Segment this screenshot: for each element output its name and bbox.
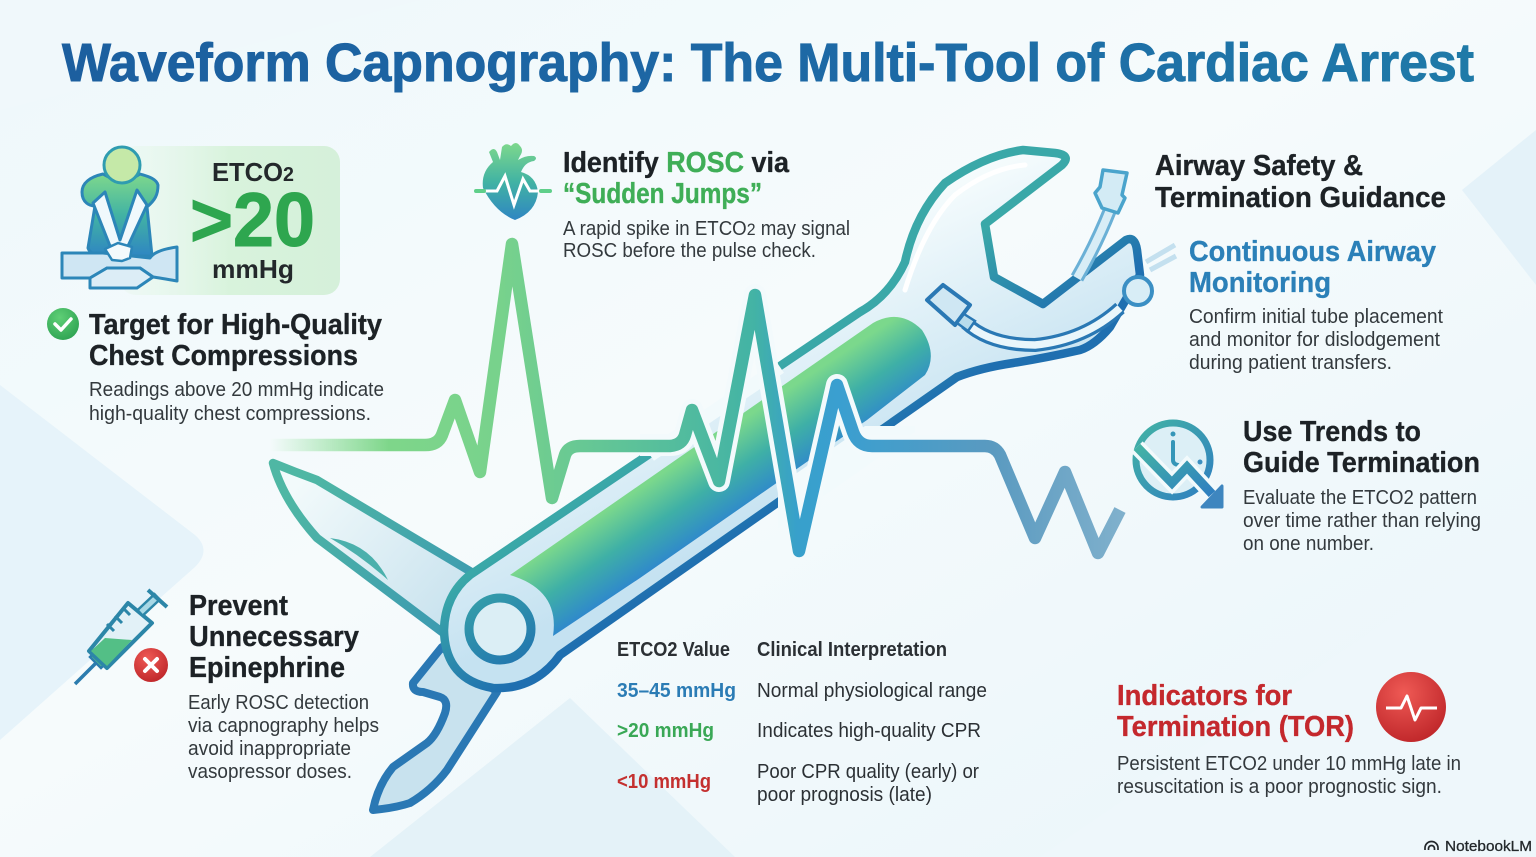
body text	[563, 218, 850, 262]
heading	[1117, 680, 1354, 743]
body text: high-quality chest compressions.	[89, 403, 371, 425]
panel: identify ROSC	[476, 143, 850, 262]
body text: Persistent ETCO2 under 10 mmHg late in	[1117, 753, 1461, 775]
heading: Epinephrine	[189, 652, 345, 684]
endotracheal tube	[927, 170, 1176, 345]
table: ETCO2 interpretation: Indicates high-quality CPR	[757, 720, 981, 742]
body text	[1117, 753, 1461, 798]
heading	[1243, 416, 1480, 479]
icon: syringe	[75, 590, 167, 684]
icon: clock with falling arrow	[1136, 423, 1222, 507]
body text: over time rather than relying	[1243, 510, 1481, 532]
subheading: Continuous Airway	[1189, 236, 1436, 268]
icon: CPR compressions	[62, 147, 177, 288]
NotebookLM logo: NotebookLM	[1445, 838, 1532, 855]
highlight	[905, 165, 1025, 290]
metric card	[120, 146, 340, 295]
heading: Indicators for	[1117, 680, 1292, 712]
panel: epinephrine	[75, 590, 379, 783]
table: ETCO2 interpretation: poor prognosis (late)	[757, 784, 932, 806]
table: ETCO2 interpretation	[617, 639, 987, 806]
table: ETCO2 interpretation: >20 mmHg	[617, 720, 714, 742]
heading: Termination (TOR)	[1117, 711, 1354, 743]
heading: Termination Guidance	[1155, 182, 1446, 214]
body text: avoid inappropriate	[188, 738, 351, 760]
body text	[188, 692, 379, 783]
subheading	[1189, 236, 1436, 299]
icon: red pulse	[1376, 672, 1446, 742]
heading: Target for High-Quality	[89, 309, 382, 341]
heading: Guide Termination	[1243, 447, 1480, 479]
table: ETCO2 interpretation: 35–45 mmHg	[617, 680, 736, 702]
heading: Identify ROSC via	[563, 147, 790, 179]
heading	[1155, 150, 1446, 214]
subheading: Monitoring	[1189, 267, 1331, 299]
body text: Evaluate the ETCO2 pattern	[1243, 487, 1477, 509]
heading: “Sudden Jumps”	[563, 178, 762, 210]
icon: heart with ECG	[476, 143, 550, 220]
panel: ETCO2 target	[47, 146, 384, 425]
table: ETCO2 interpretation: Poor CPR quality (early) or	[757, 761, 979, 783]
heading: Chest Compressions	[89, 340, 358, 372]
body text	[1189, 306, 1443, 374]
panel: trends	[1136, 416, 1481, 555]
title: Waveform Capnography: The Multi-Tool of Cardiac Arrest	[62, 33, 1474, 93]
body text: vasopressor doses.	[188, 761, 352, 783]
table: ETCO2 interpretation: <10 mmHg	[617, 771, 711, 793]
body text: Confirm initial tube placement	[1189, 306, 1443, 328]
body text: resuscitation is a poor prognostic sign.	[1117, 776, 1442, 798]
green handle grip	[510, 317, 931, 636]
wrench handle and head	[444, 150, 1140, 688]
pivot	[469, 598, 531, 660]
small blade	[373, 647, 497, 810]
body text: via capnography helps	[188, 715, 379, 737]
panel: termination indicators	[1117, 672, 1461, 798]
icon: red cross	[134, 648, 168, 682]
body text: Early ROSC detection	[188, 692, 369, 714]
table: ETCO2 interpretation: Clinical Interpretation	[757, 639, 947, 661]
body text: ROSC before the pulse check.	[563, 240, 816, 262]
icon: check	[47, 308, 79, 340]
heading	[563, 147, 790, 210]
panel: airway safety	[1155, 150, 1446, 374]
heading: Airway Safety &	[1155, 150, 1363, 182]
heading: Prevent	[189, 590, 288, 622]
table: ETCO2 interpretation: Normal physiological range	[757, 680, 987, 702]
multi-tool illustration	[273, 150, 1176, 810]
metric card: >20	[190, 178, 315, 263]
body text: during patient transfers.	[1189, 352, 1392, 374]
metric card: mmHg	[212, 254, 294, 284]
heading	[89, 309, 382, 372]
metric card: ETCO2	[212, 157, 294, 187]
main blade	[273, 463, 473, 632]
heading	[189, 590, 359, 684]
heading: Unnecessary	[189, 621, 359, 653]
heading: Use Trends to	[1243, 416, 1421, 448]
body text: on one number.	[1243, 533, 1374, 555]
waveform line	[270, 244, 1120, 553]
body text: Readings above 20 mmHg indicate	[89, 379, 384, 401]
table: ETCO2 interpretation: ETCO2 Value	[617, 639, 730, 661]
body text	[1243, 487, 1481, 555]
body text: A rapid spike in ETCO2 may signal	[563, 218, 850, 240]
body text: and monitor for dislodgement	[1189, 329, 1440, 351]
body text	[89, 379, 384, 425]
